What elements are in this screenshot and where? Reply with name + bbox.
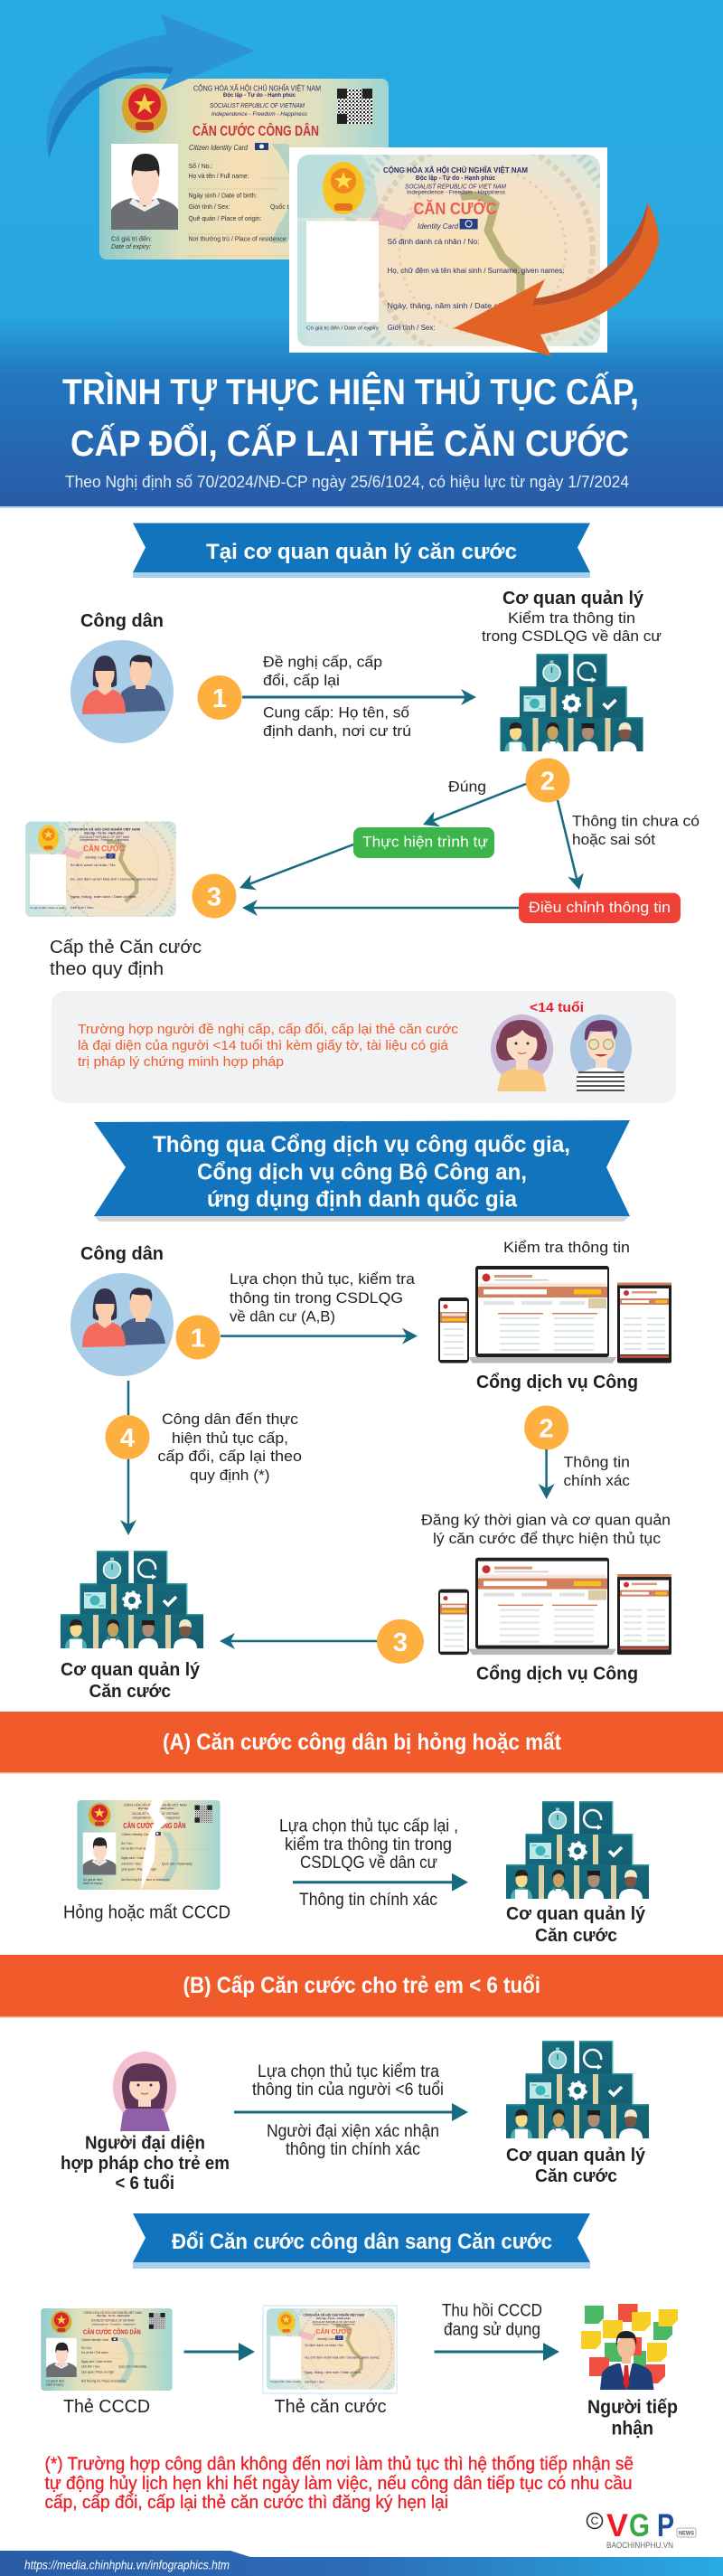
agency label: Căn cước xyxy=(535,1926,617,1946)
request text: Đề nghị cấp, cấp xyxy=(263,653,382,671)
heading banner: ứng dụng định danh quốc gia xyxy=(207,1186,518,1212)
card: new ID xyxy=(263,2291,402,2407)
callout text xyxy=(78,1022,459,1070)
title xyxy=(62,371,639,464)
footnote: cấp, cấp đổi, cấp lại thẻ căn cước thì đăng ký hẹn lại xyxy=(45,2493,448,2513)
logo: VGP: NEWS xyxy=(679,2532,694,2537)
correct label: Đúng xyxy=(448,778,486,796)
procedure text xyxy=(279,1817,458,1873)
step 2: 2 xyxy=(540,767,555,796)
card captions: Thẻ CCCD xyxy=(63,2397,150,2417)
callout text: là đại diện của người <14 tuổi thì kèm giấy tờ, tài liệu có giá xyxy=(78,1038,449,1053)
card: new ID card xyxy=(289,115,618,386)
step 1: 1 xyxy=(212,684,227,713)
register text xyxy=(421,1512,671,1547)
guardian label: < 6 tuổi xyxy=(116,2174,174,2194)
agency label xyxy=(506,2146,646,2186)
arrow xyxy=(293,1873,468,1892)
arrow: correct xyxy=(423,784,526,826)
attend text: Công dân đến thực xyxy=(162,1411,299,1428)
step 2 xyxy=(524,1405,568,1450)
revoke text xyxy=(442,2302,542,2340)
card captions xyxy=(63,2397,387,2417)
heading banner: Thông qua Cổng dịch vụ công quốc gia, xyxy=(153,1132,570,1157)
title: CẤP ĐỔI, CẤP LẠI THẺ CĂN CƯỚC xyxy=(70,421,629,464)
arrow xyxy=(184,2343,255,2361)
callout: under 14 xyxy=(52,991,676,1103)
revoke text: Thu hồi CCCD xyxy=(442,2302,542,2321)
procedure text: kiểm tra thông tin trong xyxy=(285,1835,452,1854)
missing info text: hoặc sai sót xyxy=(572,831,655,848)
heading banner xyxy=(133,523,590,578)
step 3: 3 xyxy=(393,1628,408,1657)
arrow down xyxy=(539,1449,555,1499)
logo: VGP xyxy=(587,2508,696,2550)
procedure text: thông tin của người <6 tuổi xyxy=(252,2081,444,2099)
icon: woman xyxy=(491,1014,553,1091)
citizen label: Công dân xyxy=(80,1244,164,1264)
portal label: Cổng dịch vụ Công xyxy=(476,1373,638,1392)
step 3 xyxy=(192,873,237,919)
step 3 xyxy=(377,1619,424,1664)
icon: devices xyxy=(438,1266,671,1363)
procedure text: Lựa chọn thủ tục kiểm tra xyxy=(258,2062,439,2081)
portal label: Cổng dịch vụ Công xyxy=(476,1664,638,1684)
step 1 xyxy=(175,1315,221,1360)
agency text xyxy=(482,589,662,645)
agency text: Cơ quan quản lý xyxy=(502,589,644,609)
accurate text: Thông tin xyxy=(564,1453,630,1470)
attend text: quy định (*) xyxy=(190,1467,269,1484)
agency label xyxy=(61,1660,201,1702)
orange heading xyxy=(0,1955,723,2018)
attend text: hiện thủ tục cấp, xyxy=(172,1430,288,1447)
selection text xyxy=(230,1270,416,1326)
arrow xyxy=(435,2343,559,2361)
selection text: Lựa chọn thủ tục, kiểm tra xyxy=(230,1270,416,1288)
receiver label xyxy=(587,2397,678,2439)
guardian label: Người đại diện xyxy=(85,2134,205,2154)
icon: receiver xyxy=(581,2304,678,2390)
issue text: theo quy định xyxy=(50,959,164,979)
icon: agency xyxy=(506,2041,650,2138)
guardian label: hợp pháp cho trẻ em xyxy=(61,2154,230,2174)
icon: blue curved arrow xyxy=(46,14,255,158)
agency text: Kiểm tra thông tin xyxy=(508,609,635,627)
step 1 xyxy=(197,675,242,720)
icon: citizens xyxy=(70,640,174,743)
request text: định danh, nơi cư trú xyxy=(263,722,411,740)
step 4 xyxy=(105,1415,150,1459)
missing info text: Thông tin chưa có xyxy=(572,813,700,830)
logo: VGP: V xyxy=(606,2508,629,2543)
missing info text xyxy=(572,813,700,848)
arrow down xyxy=(120,1381,136,1535)
agency label: Căn cước xyxy=(535,2166,617,2186)
arrow to agency xyxy=(220,1633,377,1649)
panel: case A damaged or lost xyxy=(0,1712,723,1946)
step 2: 2 xyxy=(540,1414,554,1443)
green box: Thực hiện trình tự xyxy=(362,834,488,851)
step 3: 3 xyxy=(207,882,221,911)
accurate text xyxy=(564,1453,631,1489)
panel: case B children under 6 xyxy=(0,1955,723,2194)
logo: VGP: C xyxy=(591,2515,599,2527)
panel: at the ID management agency xyxy=(25,523,700,1103)
step 1: 1 xyxy=(191,1324,205,1353)
icon: citizens xyxy=(70,1273,174,1376)
card captions: Thẻ căn cước xyxy=(275,2397,387,2417)
accurate text: Thông tin chính xác xyxy=(299,1891,437,1910)
icon: agency xyxy=(61,1551,204,1648)
green box xyxy=(353,827,494,858)
guardian label xyxy=(61,2134,230,2194)
arrow from red box xyxy=(242,900,519,916)
card: torn ID xyxy=(77,1799,221,1891)
icon: man xyxy=(570,1014,632,1091)
red box xyxy=(519,893,681,923)
panel: via the public service portals xyxy=(61,1120,671,1702)
selection text: thông tin trong CSDLQG xyxy=(230,1289,403,1307)
footer bar xyxy=(0,2551,723,2576)
heading banner xyxy=(94,1120,630,1222)
arrow to portal xyxy=(221,1328,418,1345)
procedure text: Lựa chọn thủ tục cấp lại , xyxy=(279,1817,458,1836)
arrow to agency xyxy=(242,689,476,705)
arrow xyxy=(234,2103,468,2121)
receiver label: Người tiếp xyxy=(587,2397,678,2418)
citizen label: Công dân xyxy=(80,611,164,631)
agency label: Cơ quan quản lý xyxy=(506,2146,646,2166)
heading banner: Tại cơ quan quản lý căn cước xyxy=(206,540,517,564)
icon: devices xyxy=(438,1558,671,1655)
logo: VGP: G xyxy=(629,2508,650,2543)
card: issued ID xyxy=(25,821,176,917)
red box: Điều chỉnh thông tin xyxy=(529,899,671,916)
request text: đổi, cấp lại xyxy=(263,672,340,689)
step 4: 4 xyxy=(120,1424,135,1453)
icon: guardian xyxy=(113,2052,176,2131)
agency text: trong CSDLQG về dân cư xyxy=(482,627,662,645)
agency label: Cơ quan quản lý xyxy=(61,1660,201,1680)
selection text: về dân cư (A,B) xyxy=(230,1307,335,1326)
logo: VGP: BAOCHINHPHU.VN xyxy=(606,2541,673,2550)
attend text: cấp đổi, cấp lại theo xyxy=(157,1448,302,1465)
revoke text: đang sử dụng xyxy=(444,2321,540,2340)
orange heading: (B) Cấp Căn cước cho trẻ em < 6 tuổi xyxy=(183,1973,540,1998)
step 2 xyxy=(526,758,569,803)
card: CCCD xyxy=(41,2308,173,2391)
accurate text: chính xác xyxy=(564,1472,631,1489)
icon: agency xyxy=(501,654,643,751)
arrow: missing info xyxy=(558,800,584,890)
heading banner xyxy=(133,2213,590,2269)
procedure text: CSDLQG về dân cư xyxy=(300,1854,437,1873)
agency label: Căn cước xyxy=(89,1682,171,1702)
confirmation text: thông tin chính xác xyxy=(286,2140,420,2159)
request text xyxy=(263,653,411,740)
icon: orange curved arrow xyxy=(454,203,659,356)
heading banner: Cổng dịch vụ công Bộ Công an, xyxy=(197,1160,527,1185)
title: TRÌNH TỰ THỰC HIỆN THỦ TỤC CẤP, xyxy=(62,371,639,412)
footnote: tự động hủy lịch hẹn khi hết ngày làm việc, nếu công dân tiếp tục có nhu cầu xyxy=(45,2474,633,2494)
age label: <14 tuổi xyxy=(530,1000,584,1015)
logo: VGP: P xyxy=(657,2508,674,2543)
heading banner: Đổi Căn cước công dân sang Căn cước xyxy=(172,2230,552,2254)
card: old citizen ID xyxy=(99,79,389,259)
orange heading: (A) Căn cước công dân bị hỏng hoặc mất xyxy=(163,1730,562,1755)
footnote: (*) Trường hợp công dân không đến nơi làm thủ tục thì hệ thống tiếp nhận sẽ xyxy=(45,2455,634,2475)
callout text: trị pháp lý chứng minh hợp pháp xyxy=(78,1054,284,1070)
icon: agency xyxy=(506,1801,650,1899)
issue text: Cấp thẻ Căn cước xyxy=(50,938,202,958)
card caption: Hỏng hoặc mất CCCD xyxy=(63,1903,230,1923)
register text: lý căn cước để thực hiện thủ tục xyxy=(433,1530,662,1547)
callout text: Trường hợp người đề nghị cấp, cấp đổi, cấp lại thẻ căn cước xyxy=(78,1022,459,1037)
footnote xyxy=(45,2455,634,2513)
panel: exchange old ID xyxy=(41,2213,678,2439)
procedure text xyxy=(252,2062,444,2099)
agency label: Cơ quan quản lý xyxy=(506,1904,646,1924)
receiver label: nhận xyxy=(611,2419,653,2439)
hero header xyxy=(0,0,723,508)
footer bar: https://media.chinhphu.vn/infographics.htm xyxy=(24,2558,230,2572)
attend text xyxy=(157,1411,302,1484)
agency label xyxy=(506,1904,646,1946)
check info label: Kiểm tra thông tin xyxy=(503,1239,630,1256)
request text: Cung cấp: Họ tên, số xyxy=(263,703,410,722)
subtitle: Theo Nghị định số 70/2024/NĐ-CP ngày 25/6/1024, có hiệu lực từ ngày 1/7/2024 xyxy=(65,473,629,491)
arrow to step 3 xyxy=(239,845,353,890)
orange heading xyxy=(0,1712,723,1774)
register text: Đăng ký thời gian và cơ quan quản xyxy=(421,1512,671,1529)
confirmation text xyxy=(267,2122,439,2159)
confirmation text: Người đại xiện xác nhận xyxy=(267,2122,439,2141)
issue text xyxy=(50,938,202,979)
